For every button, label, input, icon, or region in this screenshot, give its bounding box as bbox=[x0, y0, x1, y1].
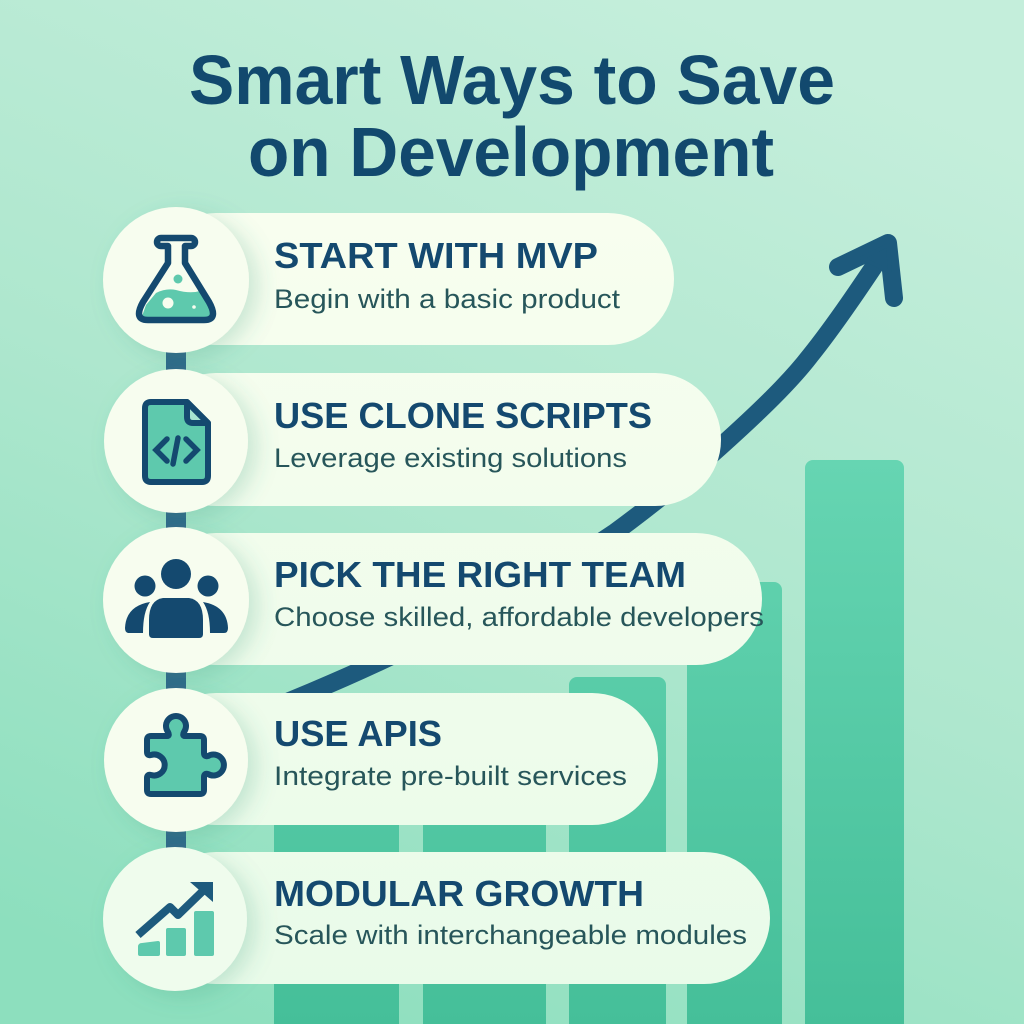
description: Scale with interchangeable modules bbox=[274, 920, 747, 950]
step 2: use clone scripts bbox=[104, 369, 721, 513]
description: Choose skilled, affordable developers bbox=[274, 602, 764, 632]
step 3: pick the right team bbox=[103, 527, 764, 673]
step 1: start with MVP bbox=[103, 207, 674, 353]
icon: team bbox=[125, 559, 228, 638]
icon circle bbox=[104, 369, 248, 513]
pill bbox=[150, 533, 762, 665]
icon: flask bbox=[139, 238, 213, 320]
timeline connector bbox=[166, 340, 186, 880]
icon: growth chart bbox=[138, 882, 214, 956]
title bbox=[189, 41, 835, 191]
icon circle bbox=[103, 847, 247, 991]
step 4: use APIs bbox=[104, 688, 658, 832]
heading: PICK THE RIGHT TEAM bbox=[274, 554, 686, 595]
description: Begin with a basic product bbox=[274, 284, 621, 314]
title: on Development bbox=[248, 113, 774, 191]
icon: puzzle piece bbox=[147, 716, 224, 794]
heading: USE CLONE SCRIPTS bbox=[274, 395, 652, 436]
icon circle bbox=[104, 688, 248, 832]
bar chart bbox=[274, 460, 904, 1024]
icon circle bbox=[103, 207, 249, 353]
heading: START WITH MVP bbox=[274, 235, 598, 276]
pill bbox=[150, 693, 658, 825]
description: Integrate pre-built services bbox=[274, 761, 627, 791]
step 5: modular growth bbox=[103, 847, 770, 991]
pill bbox=[150, 852, 770, 984]
heading: MODULAR GROWTH bbox=[274, 873, 644, 914]
icon circle bbox=[103, 527, 249, 673]
pill bbox=[150, 213, 674, 345]
pill bbox=[150, 373, 721, 506]
growth arrow bbox=[275, 243, 894, 707]
icon: code file bbox=[145, 402, 208, 482]
description: Leverage existing solutions bbox=[274, 443, 627, 473]
title: Smart Ways to Save bbox=[189, 41, 835, 119]
heading: USE APIS bbox=[274, 713, 442, 754]
